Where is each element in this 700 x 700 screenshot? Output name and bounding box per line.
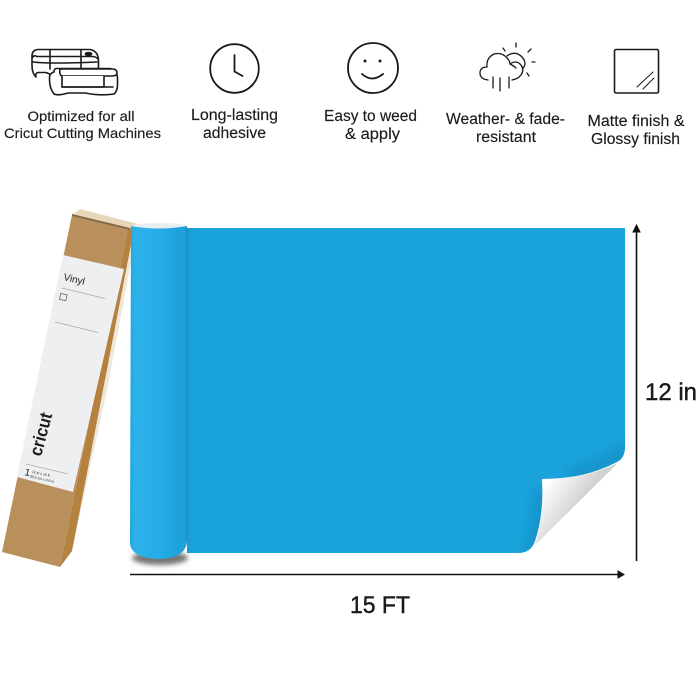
text: weather and fade resistant <box>446 111 565 146</box>
text: long-lasting adhesive: Long-lasting <box>191 107 278 124</box>
box label: Vinyl <box>62 272 86 288</box>
arrow: height dimension <box>633 225 640 561</box>
text: easy to weed and apply <box>324 108 417 143</box>
box label: 1 <box>23 467 32 479</box>
text: optimized for all machines: Cricut Cutting Machines <box>4 125 161 141</box>
icon: weather cloud and sun <box>480 43 535 91</box>
box label <box>17 255 124 492</box>
text: weather and fade resistant: Weather- & fade- <box>446 111 565 128</box>
curled corner fold <box>535 463 618 545</box>
text: weather and fade resistant: resistant <box>476 129 537 146</box>
vinyl roll <box>130 223 195 565</box>
text: optimized for all machines: Optimized for all <box>28 108 134 124</box>
arrow: length dimension <box>130 571 624 578</box>
icon: clock <box>210 44 259 93</box>
box label: 30.5 cm x 4.6 m <box>29 474 55 484</box>
text: matte and glossy finish: Glossy finish <box>591 131 680 148</box>
box label: 12 in x 15 ft <box>31 470 50 478</box>
text: easy to weed and apply: Easy to weed <box>324 108 417 125</box>
text: long-lasting adhesive <box>191 107 278 142</box>
icon: cutting machines <box>32 50 118 95</box>
icon: smiley face <box>348 43 398 93</box>
text: matte and glossy finish <box>588 113 685 148</box>
label: 12 in: 12 in <box>645 379 697 406</box>
text: easy to weed and apply: & apply <box>345 126 400 143</box>
icon: finish square <box>614 50 658 93</box>
box label: cricut <box>26 410 56 458</box>
vinyl sheet with curled corner <box>187 228 628 555</box>
product box <box>2 209 138 567</box>
text: optimized for all machines <box>4 108 161 141</box>
text: long-lasting adhesive: adhesive <box>203 125 266 142</box>
label: 15 FT: 15 FT <box>350 592 410 619</box>
text: matte and glossy finish: Matte finish & <box>588 113 685 130</box>
